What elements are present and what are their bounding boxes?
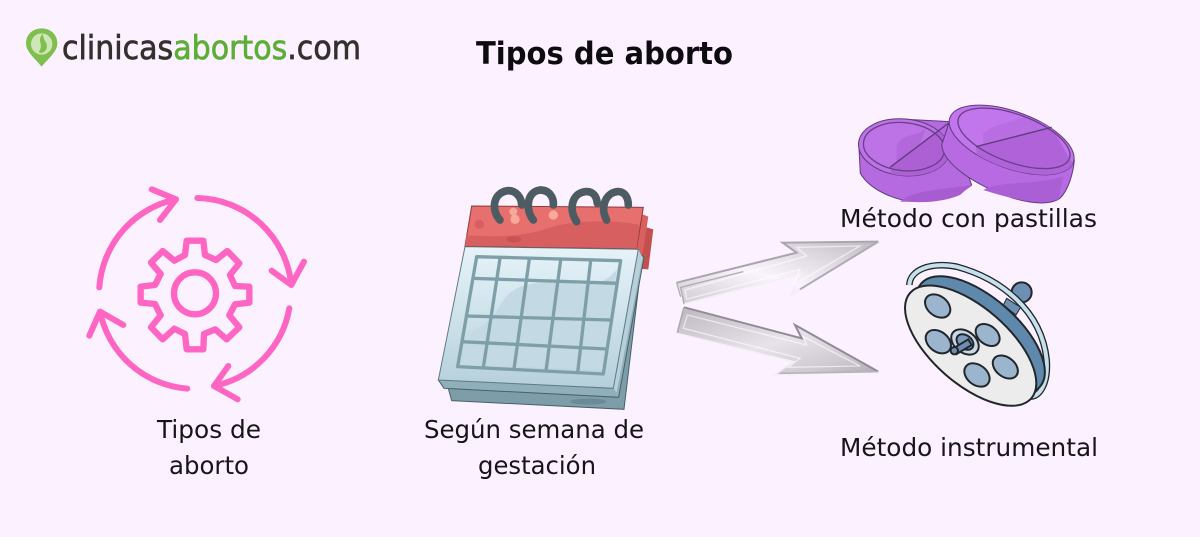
title: Tipos de aborto xyxy=(476,36,733,72)
label: tipos de aborto xyxy=(156,415,261,480)
label: método con pastillas: Método con pastillas xyxy=(840,204,1097,233)
label: según semana de gestación: Según semana de xyxy=(424,415,644,444)
arrow: lower xyxy=(677,307,878,375)
label: según semana de gestación xyxy=(424,415,644,480)
arrow: upper xyxy=(677,242,878,304)
icon: gear with four circular arrows xyxy=(89,189,304,399)
label: método instrumental: Método instrumental xyxy=(840,433,1098,462)
icon: purple pills xyxy=(858,104,1075,204)
icon: green location pin xyxy=(26,28,57,67)
label: tipos de aborto: Tipos de xyxy=(156,415,261,444)
arrows: silver arrows to both methods xyxy=(677,242,878,375)
icon: calendar xyxy=(438,190,653,409)
right pill xyxy=(941,104,1075,204)
left pill xyxy=(856,114,972,202)
icon: surgical lamp xyxy=(885,255,1065,427)
label: según semana de gestación: gestación xyxy=(478,451,596,480)
logo wordmark: clinicasabortos.com xyxy=(62,28,361,67)
logo: clinicasabortos.com xyxy=(26,28,361,67)
label: tipos de aborto: aborto xyxy=(169,451,249,480)
